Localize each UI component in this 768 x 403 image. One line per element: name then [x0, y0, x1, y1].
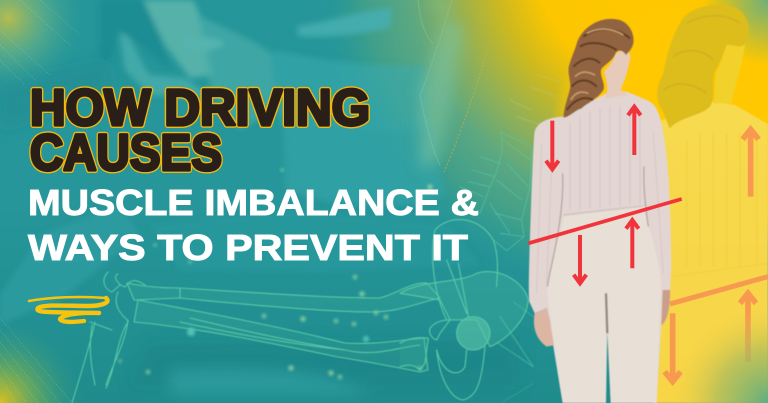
arrow: left shoulder down	[546, 121, 559, 169]
arrow: left hip down	[574, 235, 586, 283]
title: How Driving Causes: HOW DRIVING	[30, 79, 370, 136]
upper radius bone	[127, 283, 440, 312]
subtitle: Muscle Imbalance and Ways to Prevent It: WAYS TO PREVENT IT	[28, 227, 468, 268]
hand bones	[72, 272, 145, 403]
sleeve edge lines	[418, 0, 452, 165]
woman seen from behind	[529, 19, 671, 403]
icon: yellow scribble	[29, 297, 108, 322]
title: How Driving Causes: CAUSES	[30, 124, 222, 181]
title: How Driving Causes: HOW DRIVING	[30, 79, 370, 136]
ulna bone	[134, 300, 428, 372]
subtitle: Muscle Imbalance and Ways to Prevent It: MUSCLE IMBALANCE &	[28, 182, 479, 223]
background: glowing particles	[118, 168, 432, 379]
hair	[563, 19, 634, 117]
title: How Driving Causes	[30, 79, 370, 181]
background photo: driver silhouette	[0, 0, 520, 395]
clothing: sweater and trousers	[529, 92, 671, 403]
ghost fade into bottom right corner	[660, 300, 768, 403]
illustration: skeleton forearm and hip bones	[72, 75, 560, 403]
red arrows and hip tilt line	[528, 107, 682, 283]
arrow: right shoulder up	[628, 107, 641, 155]
sweater ribs and folds	[537, 105, 663, 333]
hip tilt line	[528, 199, 682, 243]
subtitle: Muscle Imbalance and Ways to Prevent It	[28, 182, 479, 268]
ribs and vertebrae	[460, 75, 560, 402]
title: How Driving Causes: CAUSES	[30, 124, 222, 181]
neck and hands	[534, 51, 670, 347]
ghost figure: yellow overlay of woman	[653, 5, 768, 403]
background: halftone corners	[0, 0, 80, 403]
pelvis, femur head and lumbar spine	[400, 220, 528, 400]
arrow: right hip up	[626, 220, 639, 268]
ghost figure: orange arrows and tilt line	[665, 129, 768, 382]
